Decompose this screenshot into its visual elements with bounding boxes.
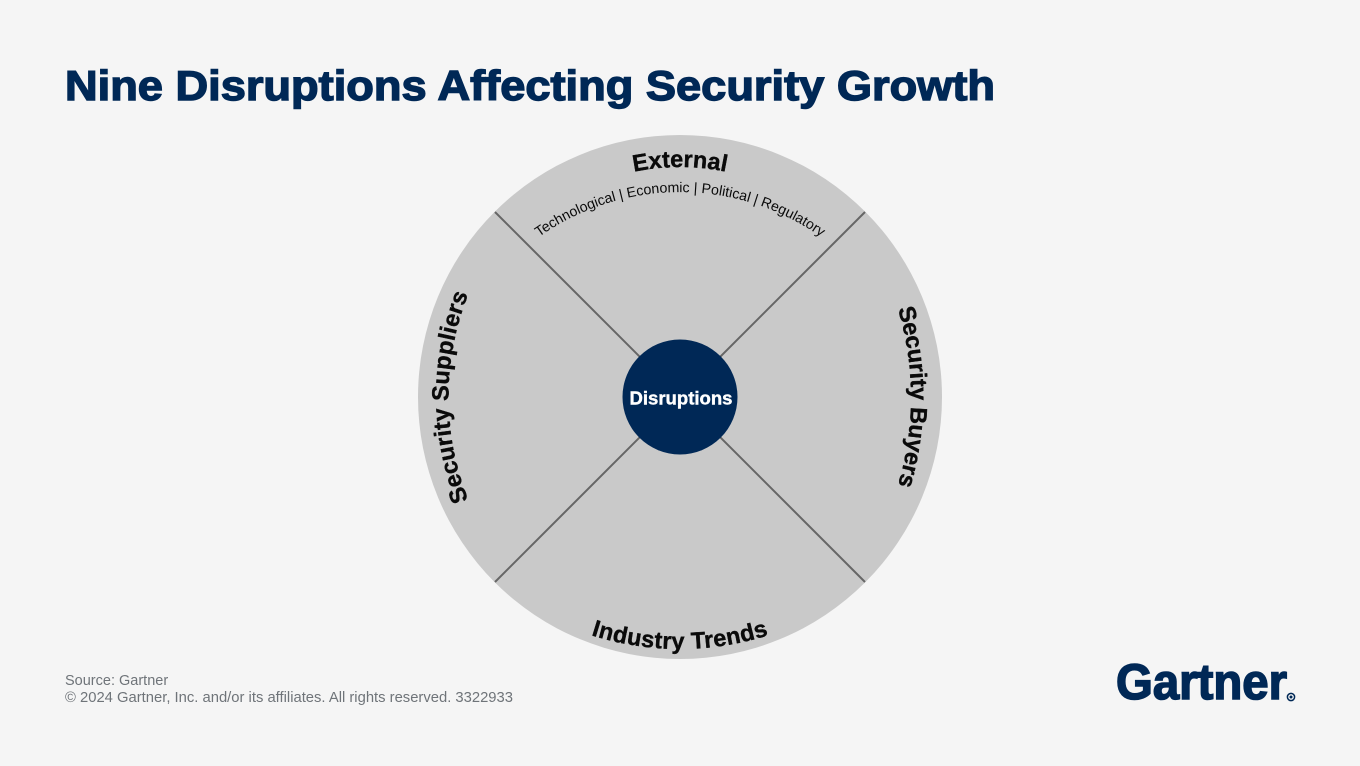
wheel background: [418, 135, 942, 659]
segment label: External: External: [632, 152, 728, 172]
segment label: Security Buyers: Security Buyers: [899, 306, 928, 487]
source note: [65, 673, 513, 706]
center circle: Disruptions: [622, 340, 738, 454]
logo: Gartner: Gartner: [1116, 654, 1287, 710]
diagram: disruption wheel: [418, 135, 942, 659]
segment label: Security Suppliers: Security Suppliers: [432, 292, 467, 504]
segment label: Industry Trends: Industry Trends: [592, 620, 768, 654]
segment sublabel: external categories: Technological | Economic | Political | Regulatory: [534, 182, 826, 236]
title: Nine Disruptions Affecting Security Growth: [65, 62, 995, 109]
center circle: Disruptions: Disruptions: [630, 388, 732, 408]
source note: Source: Gartner: [65, 673, 168, 689]
source note: © 2024 Gartner, Inc. and/or its affiliates. All rights reserved. 3322933: [65, 690, 513, 706]
